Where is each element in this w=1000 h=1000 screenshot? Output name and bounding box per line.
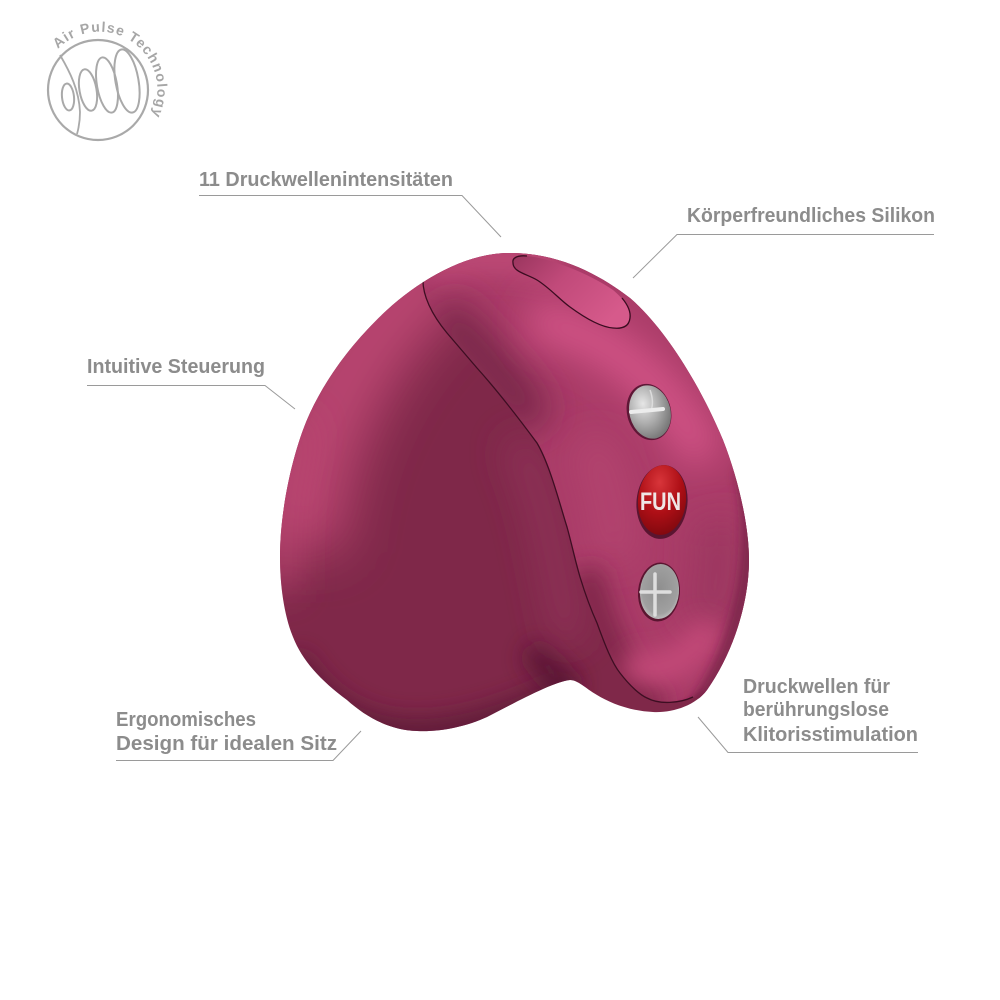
product: device body: [280, 253, 749, 732]
button: plus: [636, 561, 682, 623]
callout: Ergonomisches Design für idealen Sitz: [116, 709, 361, 760]
button: FUN: FUN: [640, 488, 681, 516]
callout: 11 Druckwellenintensitäten: 11 Druckwellenintensitäten: [199, 169, 453, 191]
callout: Druckwellen für berührungslose Klitorisstimulation: Klitorisstimulation: [743, 724, 918, 746]
panel: upper right shell: [424, 253, 749, 702]
callout: Intuitive Steuerung: [87, 356, 295, 409]
control pad: [513, 256, 630, 328]
button: FUN: [633, 463, 691, 541]
callout: Intuitive Steuerung: Intuitive Steuerung: [87, 356, 265, 378]
logo: Air Pulse Technology: Air Pulse Technology: [54, 22, 168, 118]
callout: 11 Druckwellenintensitäten: [199, 169, 501, 237]
callout: Ergonomisches Design für idealen Sitz: Design für idealen Sitz: [116, 733, 337, 755]
button: minus: [621, 379, 677, 445]
callout: Körperfreundliches Silikon: [633, 205, 935, 278]
callout: Druckwellen für berührungslose Klitorisstimulation: Druckwellen für: [743, 676, 890, 698]
callout: Ergonomisches Design für idealen Sitz: Ergonomisches: [116, 709, 256, 731]
callout: Druckwellen für berührungslose Klitorisstimulation: berührungslose: [743, 699, 889, 721]
callout: Druckwellen für berührungslose Klitorisstimulation: [698, 676, 918, 752]
seam line: [423, 278, 693, 702]
callout: Körperfreundliches Silikon: Körperfreundliches Silikon: [687, 205, 935, 227]
